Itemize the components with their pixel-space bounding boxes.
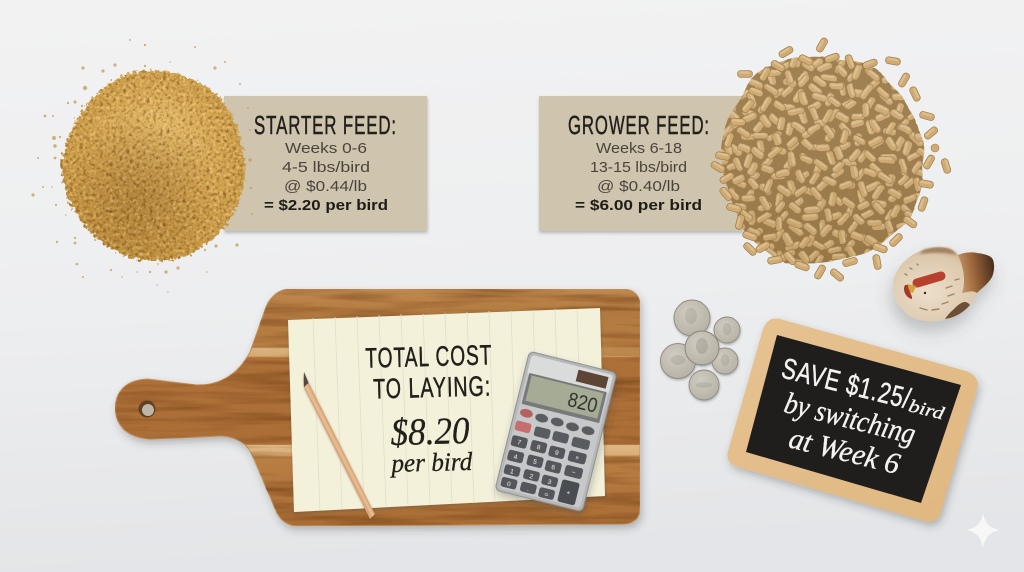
chicken comb bbox=[917, 276, 941, 283]
calculator keypad: 9 bbox=[554, 449, 560, 457]
heading: starter feed: STARTER FEED: bbox=[254, 110, 397, 140]
calculator keypad: 8 bbox=[536, 444, 541, 452]
calculator keypad: = bbox=[544, 491, 549, 499]
text: chalk message: at Week 6 bbox=[786, 422, 903, 481]
icon: ceramic chicken bbox=[893, 247, 994, 321]
icon: sparkle watermark bbox=[966, 513, 1000, 548]
icon: starter feed pile bbox=[31, 39, 253, 293]
text: calculator display: 820 bbox=[565, 388, 600, 418]
calculator keypad: 1 bbox=[509, 468, 515, 476]
calculator keypad: 7 bbox=[516, 439, 522, 447]
icon: pencil bbox=[303, 372, 375, 519]
calculator keypad: 2 bbox=[529, 473, 534, 481]
calculator keypad: 3 bbox=[547, 479, 552, 486]
icon: grower feed pile bbox=[698, 37, 952, 283]
calculator keypad: + bbox=[566, 489, 571, 497]
text: grower feed details: Weeks 6-18 bbox=[596, 140, 682, 157]
text: starter feed details bbox=[264, 140, 388, 214]
text: total price: $8.20 bbox=[390, 410, 470, 454]
panel: chalkboard callout bbox=[727, 318, 978, 522]
text: total price bbox=[388, 410, 474, 478]
calculator keypad: 6 bbox=[550, 464, 556, 472]
calculator keypad: 4 bbox=[513, 454, 518, 461]
icon: calculator bbox=[495, 351, 617, 512]
calculator keypad: 5 bbox=[532, 458, 538, 466]
text: starter feed details: = $2.20 per bird bbox=[264, 197, 388, 214]
text: total price: per bird bbox=[389, 447, 474, 478]
calculator keypad: 0 bbox=[506, 481, 512, 489]
calculator keypad: × bbox=[574, 455, 580, 462]
text: starter feed details: @ $0.44/lb bbox=[284, 178, 367, 195]
text: starter feed details: Weeks 0-6 bbox=[285, 140, 367, 157]
text: chalk message: by switching bbox=[781, 386, 919, 451]
text: chalk message: SAVE $1.25/ bbox=[778, 353, 914, 416]
calculator keypad bbox=[500, 407, 596, 506]
heading: total cost bbox=[365, 339, 494, 405]
text: grower feed details: @ $0.40/lb bbox=[597, 178, 680, 195]
heading: grower feed: GROWER FEED: bbox=[568, 110, 710, 140]
calculator keypad: − bbox=[571, 469, 576, 477]
calculator keypad: . bbox=[526, 486, 530, 493]
text: starter feed details: 4-5 lbs/bird bbox=[282, 159, 370, 176]
text: grower feed details bbox=[575, 140, 702, 214]
panel: grower feed card bbox=[539, 96, 743, 231]
text: grower feed details: 13-15 lbs/bird bbox=[590, 159, 687, 176]
panel: starter feed card bbox=[224, 96, 427, 231]
text: chalk message: bird bbox=[907, 395, 948, 424]
text: chalk message bbox=[762, 353, 950, 489]
heading: total cost: TOTAL COST bbox=[365, 339, 493, 374]
icon: board hanging hole bbox=[138, 400, 156, 418]
chicken beak and wattle bbox=[904, 284, 916, 299]
text: grower feed details: = $6.00 per bird bbox=[575, 197, 702, 214]
heading: total cost: TO LAYING: bbox=[373, 370, 492, 404]
panel: cutting board bbox=[115, 289, 640, 526]
panel: notepad bbox=[288, 308, 605, 512]
icon: coins bbox=[660, 300, 740, 400]
